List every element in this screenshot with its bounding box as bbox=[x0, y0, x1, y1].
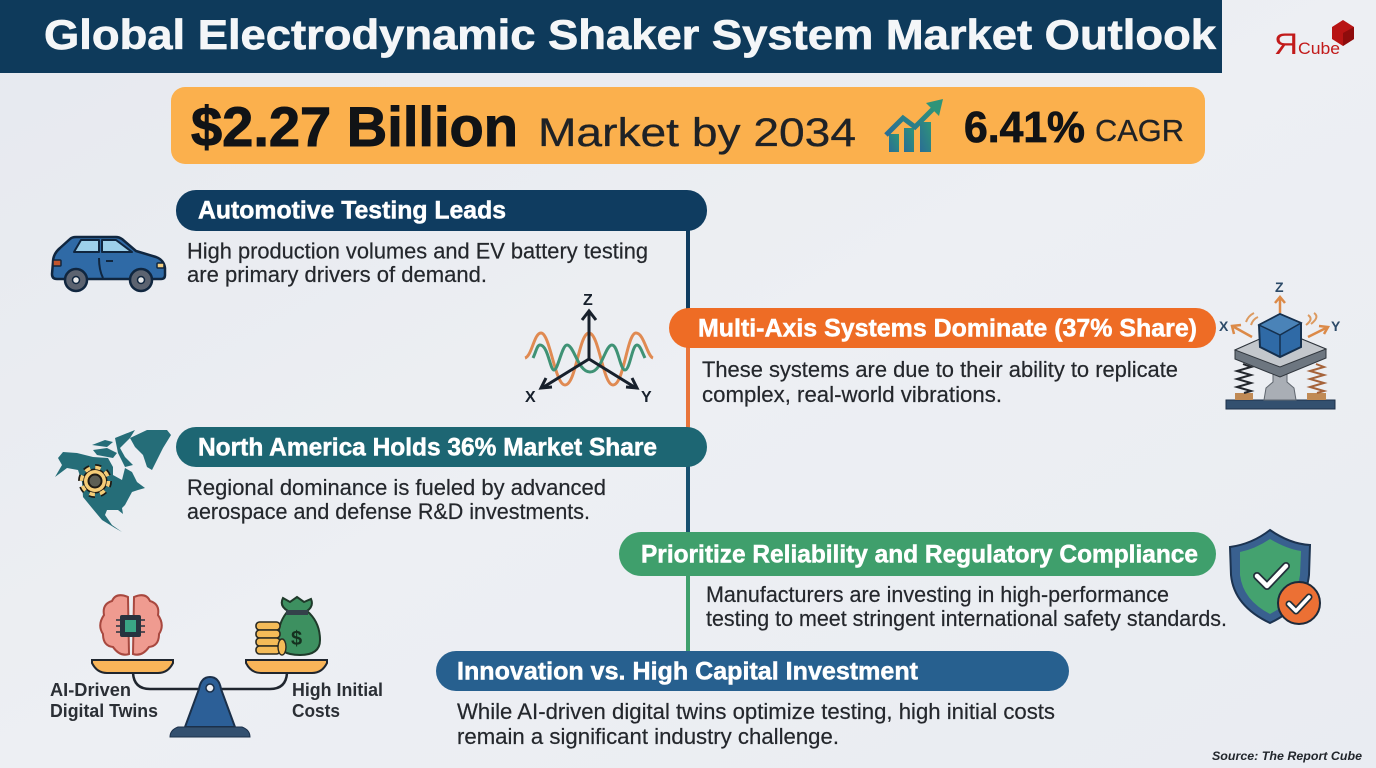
scale beam bbox=[133, 673, 287, 689]
logo: RCube bbox=[1274, 20, 1354, 61]
icon: shaker table bbox=[1219, 279, 1341, 409]
icon: shaker table: X bbox=[1219, 318, 1229, 334]
icon: XYZ vibration axes: X bbox=[525, 389, 536, 406]
text: innovation: remain a significant industry challenge. bbox=[457, 724, 839, 749]
icon: balance scale bbox=[50, 595, 383, 737]
panel: automotive testing bbox=[176, 190, 707, 287]
heading: innovation: Innovation vs. High Capital Investment bbox=[457, 658, 919, 686]
label: AI-driven digital twins bbox=[50, 680, 158, 721]
text: reliability bbox=[706, 582, 1227, 631]
left pan bbox=[92, 660, 173, 673]
text: North America: Regional dominance is fueled by advanced bbox=[187, 475, 606, 500]
text: innovation bbox=[457, 699, 1055, 749]
text: North America bbox=[187, 475, 606, 524]
key stat banner: Market by 2034 bbox=[538, 111, 856, 155]
text: reliability: Manufacturers are investing in high-performance bbox=[706, 582, 1169, 607]
heading: reliability bbox=[619, 532, 1216, 576]
label: AI-driven digital twins: AI-Driven bbox=[50, 680, 131, 700]
panel: innovation vs capital bbox=[436, 651, 1069, 749]
icon: AI brain bbox=[100, 595, 162, 655]
panel: North America bbox=[176, 427, 707, 524]
timeline spine bbox=[686, 228, 690, 653]
heading: innovation bbox=[436, 651, 1069, 691]
icon: gear bbox=[81, 467, 109, 495]
heading: multi-axis bbox=[669, 308, 1216, 348]
icon: growth chart bbox=[886, 99, 943, 152]
text: innovation: While AI-driven digital twins optimize testing, high initial costs bbox=[457, 699, 1055, 724]
key stat banner: CAGR bbox=[1095, 113, 1184, 148]
icon: shaker table: Y bbox=[1331, 318, 1341, 334]
right pan bbox=[246, 660, 327, 673]
source note: Source: The Report Cube bbox=[1212, 749, 1362, 763]
text: multi-axis bbox=[702, 357, 1178, 407]
panel: multi-axis systems bbox=[669, 308, 1216, 407]
logo: RCube: Я bbox=[1274, 28, 1298, 61]
logo: RCube: Cube bbox=[1298, 39, 1340, 58]
text: automotive bbox=[187, 238, 648, 287]
header banner with title: Global Electrodynamic Shaker System Market Outlook bbox=[44, 11, 1217, 58]
text: North America: aerospace and defense R&D investments. bbox=[187, 499, 590, 524]
icon: North America map with gear bbox=[55, 430, 171, 532]
label: high initial costs bbox=[292, 680, 383, 721]
text: automotive: High production volumes and EV battery testing bbox=[187, 238, 648, 264]
key stat banner bbox=[171, 87, 1205, 164]
heading: automotive bbox=[176, 190, 707, 231]
text: multi-axis: complex, real-world vibrations. bbox=[702, 382, 1002, 407]
heading: multi-axis: Multi-Axis Systems Dominate (37% Share) bbox=[698, 314, 1197, 342]
icon: shaker table: Z bbox=[1275, 279, 1284, 295]
heading: North America: North America Holds 36% Market Share bbox=[198, 434, 657, 462]
heading: North America bbox=[176, 427, 707, 467]
icon: XYZ vibration axes: Z bbox=[583, 292, 593, 309]
text: automotive: are primary drivers of demand. bbox=[187, 262, 487, 287]
text: reliability: testing to meet stringent international safety standards. bbox=[706, 606, 1227, 631]
icon: shield with checkmarks bbox=[1230, 530, 1320, 624]
header banner with title bbox=[0, 0, 1222, 73]
icon: XYZ vibration axes: Y bbox=[641, 389, 652, 406]
icon: car bbox=[52, 237, 165, 291]
panel: reliability and compliance bbox=[619, 532, 1227, 631]
key stat banner: $2.27 Billion bbox=[191, 95, 518, 158]
heading: automotive: Automotive Testing Leads bbox=[198, 196, 506, 224]
icon: XYZ vibration axes bbox=[525, 292, 653, 406]
key stat banner: 6.41% bbox=[964, 103, 1085, 152]
fulcrum bbox=[170, 677, 250, 737]
icon: coins and money bag bbox=[256, 597, 320, 655]
label: AI-driven digital twins: Digital Twins bbox=[50, 701, 158, 721]
icon: coins and money bag: $ bbox=[291, 628, 302, 650]
label: high initial costs: High Initial bbox=[292, 680, 383, 700]
heading: reliability: Prioritize Reliability and Regulatory Compliance bbox=[641, 540, 1198, 568]
text: multi-axis: These systems are due to their ability to replicate bbox=[702, 357, 1178, 382]
label: high initial costs: Costs bbox=[292, 701, 340, 721]
